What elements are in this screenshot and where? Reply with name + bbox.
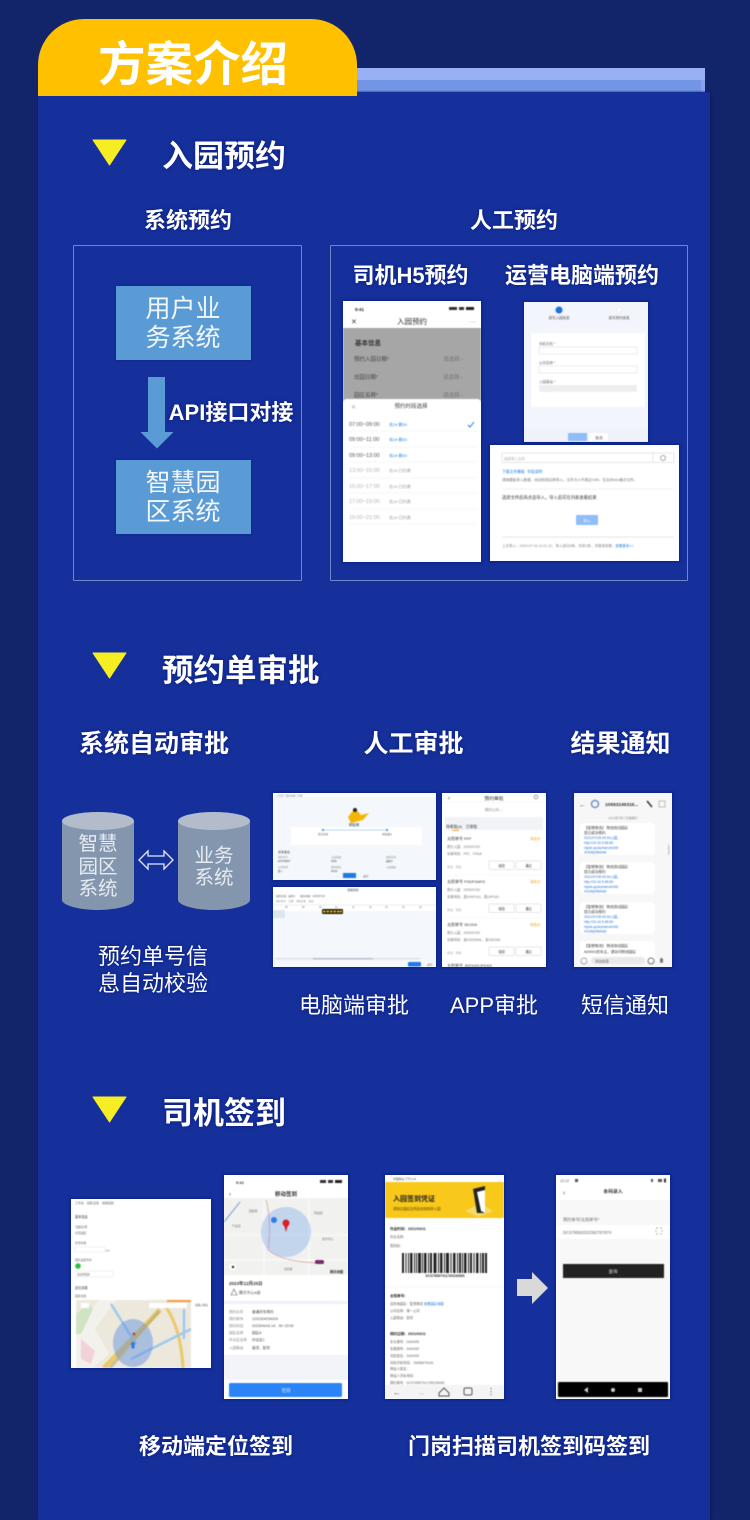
screenshot: PC approval detail: 提交申请 [318, 832, 328, 836]
heading: driver H5 booking: 司机H5预约 [352, 263, 469, 288]
screenshot: SMS notice: 2021/07/28 00:00入园， [584, 914, 621, 919]
screenshot: PC approval detail [273, 793, 436, 880]
screenshot: PC approval detail: 园区A [386, 859, 393, 863]
screenshot: mobile check-in: 创新路 [284, 1267, 293, 1271]
screenshot: mobile check-in: 腾讯中心A座 [239, 1290, 261, 1295]
screenshot: APP approval: 预计入园：2025/07/20 [447, 844, 480, 849]
screenshot: driver H5 phone: 名24 已约满 [389, 467, 411, 473]
screenshot: PC approval detail: 第一 [278, 869, 284, 873]
screenshot: check-in voucher: → [417, 1388, 425, 1397]
screenshot: PC upload: 选择导入文件 [504, 456, 525, 461]
screenshot: SMS notice: 2h3d9j2f8d0db [584, 850, 607, 854]
screenshot: driver H5 phone: 名24 已约满 [389, 483, 411, 489]
screenshot: gate entry: 条码录入 [603, 1188, 623, 1195]
screenshot: SMS notice: 2021/07/28 00:00入园， [584, 835, 621, 840]
screenshot: APP approval: 通过 [525, 863, 532, 868]
heading: manual approval: 人工审批 [363, 730, 464, 758]
screenshot: check-in voucher: 司机手机号码：15658679434 [390, 1360, 433, 1365]
screenshot: PC form: 填写入园信息 [548, 315, 570, 320]
screenshot: SMS notice: http://10.42.5.86:80 [584, 841, 613, 845]
screenshot: PC approval detail: 预约单号 [278, 855, 289, 859]
section 1 marker: triangle [92, 140, 126, 166]
screenshot: PC approval schedule: 09 [302, 907, 305, 909]
screenshot: APP approval: 预约公司 ⌄ [485, 807, 503, 812]
heading: auto approval: 系统自动审批 [79, 730, 229, 758]
screenshot: gate entry [556, 1175, 670, 1399]
section 3 marker: triangle [92, 1096, 126, 1122]
screenshot: check-in voucher: 押运人手机号码： [390, 1373, 416, 1378]
screenshot: PC approval detail: 返回 [363, 874, 369, 878]
screenshot: APP approval: 申请 : 司机 [447, 864, 462, 869]
box: user business system: 用户业 [145, 294, 220, 322]
screenshot: driver H5 phone: 名24 剩20 [389, 452, 408, 458]
screenshot: check-in voucher: 预约单号：DCS78567911765230665 [390, 1380, 445, 1385]
screenshot: driver H5 phone: 名24 剩20 [389, 436, 408, 442]
screenshot: PC form: 司机手机 * [539, 341, 556, 346]
screenshot: PC upload: 字段说明 [527, 469, 542, 474]
screenshot: driver H5 phone: 9:41 [355, 307, 365, 312]
screenshot: driver H5 phone: 07:00~09:00 [349, 422, 380, 428]
section 2 marker: triangle [92, 652, 126, 678]
screenshot: driver H5 phone: 19:00~21:00 [349, 515, 380, 521]
sub heading: manual booking: 人工预约 [470, 208, 558, 233]
screenshot: SMS notice: /dpsb-quduzhanxin/h5/ [584, 885, 618, 889]
caption: auto check [98, 944, 208, 996]
screenshot: mobile check-in: 2023/04/16 14：00~15:00 [252, 1324, 294, 1328]
screenshot: PC approval schedule: 排期详情 [347, 888, 359, 892]
screenshot: PC approval detail: 工作台 / 预约审批 / 详情 [276, 794, 303, 798]
screenshot: driver H5 phone: 基本信息 [355, 338, 382, 347]
screenshot: driver H5 phone: 请选择 › [443, 373, 463, 381]
screenshot: driver H5 phone: ✕ [351, 405, 356, 411]
screenshot: SMS notice: 2h3d9j2f8d0db [584, 930, 607, 934]
screenshot: driver H5 phone: 09:00~11:00 [349, 437, 379, 443]
screenshot: APP approval: 申请 : 司机 [447, 907, 462, 912]
screenshot: PC approval detail: 预约时段 [331, 865, 342, 869]
screenshot: APP approval: 申请 : 司机 [447, 950, 462, 955]
screenshot: SMS notice: 2h3d9j2f8d0db [584, 890, 607, 894]
screenshot: APP approval: 审批中 [530, 922, 541, 927]
screenshot: mobile check-in: 普通货车预约 [252, 1309, 274, 1314]
screenshot: driver H5 phone: 13:00~15:00 [349, 468, 380, 474]
caption: auto check: 预约单号信 [98, 944, 208, 969]
screenshot: check-in voucher: 作业时间：2021/03/11 [390, 1226, 426, 1231]
screenshot: geofence settings: 请输入地址 [195, 1303, 208, 1307]
icon: database smart park [62, 812, 134, 910]
screenshot: mobile check-in: 9:41 [236, 1180, 245, 1185]
screenshot: gate entry: 查询 [608, 1268, 618, 1275]
heading: result notice: 结果通知 [570, 730, 670, 758]
screenshot: mobile check-in: 预约单号 [229, 1316, 244, 1321]
box: user business system [116, 286, 250, 360]
screenshot: mobile check-in: 预约业务 [229, 1309, 244, 1314]
screenshot: SMS notice: 10693249316... [605, 802, 638, 808]
screenshot: check-in voucher: 押运人姓名： [390, 1366, 410, 1371]
screenshot: PC upload: 下载文件模板 [502, 469, 525, 474]
screenshot: SMS notice: 2021/07/28 00:00入园， [584, 874, 621, 879]
screenshot: driver H5 phone: 名24 已约满 [389, 514, 411, 520]
screenshot: geofence settings: 签到半径 [75, 1241, 86, 1245]
screenshot: driver H5 phone: 请选择 › [443, 391, 463, 399]
screenshot: PC approval schedule: 14 [385, 907, 388, 909]
screenshot: SMS notice: 【智慧物流】 物流测试园区 [584, 904, 629, 909]
screenshot: PC approval schedule: 11 [335, 907, 338, 909]
caption: PC approval: 电脑端审批 [299, 993, 409, 1018]
section 3 heading: 司机签到 [162, 1096, 286, 1131]
screenshot: APP approval: 预约审批 [484, 795, 504, 802]
screenshot: SMS notice: 【智慧物流】 物流测试园区 [584, 864, 629, 869]
screenshot: mobile check-in: 移动签到 [275, 1190, 297, 1198]
screenshot: driver H5 phone: 名24 剩20 [389, 421, 408, 427]
screenshot: geofence settings: 请选择园区 [77, 1272, 90, 1276]
screenshot: mobile check-in: 科技园 [314, 1211, 323, 1215]
arrow: down [140, 377, 174, 448]
screenshot: mobile check-in: 腾讯地图 [330, 1269, 344, 1274]
screenshot: check-in voucher: 公司名称：第一公司 [390, 1308, 420, 1313]
screenshot: PC approval schedule: 12 [352, 907, 355, 909]
icon: database business system [178, 812, 250, 910]
screenshot: APP approval: 预计入园：2025/07/20 [447, 930, 480, 935]
light strip behind panel [340, 68, 705, 96]
screenshot: SMS notice [574, 793, 672, 967]
screenshot: PC approval detail: DCS78567 [278, 860, 291, 863]
screenshot: driver H5 phone: ✕ [351, 319, 357, 326]
screenshot: APP approval: 太阳单号 SK2SA [447, 921, 477, 927]
screenshot: APP approval: 审批中 [530, 879, 541, 884]
screenshot: geofence settings: 基本信息 [75, 1214, 88, 1219]
screenshot: PC approval detail: 入园事由 [386, 865, 397, 869]
screenshot: PC approval schedule: 15 [402, 907, 405, 909]
screenshot: driver H5 phone: 园区名称* [354, 391, 379, 399]
screenshot: check-in voucher: 目的地园区：智慧物流 查看园区地图 [390, 1301, 444, 1306]
screenshot: mobile check-in: 装货、卸货 [252, 1345, 270, 1350]
screenshot: driver H5 phone: 出园日期* [354, 373, 379, 381]
box: user business system: 务系统 [145, 324, 220, 352]
screenshot: driver H5 phone: 入园预约 [397, 316, 427, 326]
screenshot: mobile check-in: ‹ [229, 1192, 231, 1198]
screenshot: driver H5 phone [343, 301, 481, 562]
screenshot: PC approval detail: 入园日期 [331, 855, 342, 859]
screenshot: check-in voucher: 请到达园区后凭此码到岗亭入园 [393, 1206, 441, 1211]
screenshot: PC approval schedule: 08 [285, 907, 288, 909]
screenshot: check-in voucher: ← [393, 1388, 401, 1397]
screenshot: SMS notice: http://10.42.5.86:80 [584, 920, 613, 924]
screenshot: driver H5 phone: ··· [469, 319, 476, 326]
screenshot: geofence settings: 示范园区 [75, 1231, 86, 1235]
screenshot: geofence settings: 定位设置 [75, 1285, 88, 1290]
screenshot: check-in voucher: 司机姓名：DAD939 [390, 1353, 419, 1358]
screenshot: gate entry: 预约单号/太阳单号* [563, 1216, 600, 1223]
screenshot: SMS notice: /dpsb-quduzhanxin/h5/ [584, 925, 618, 929]
screenshot: APP approval: 预计入园：2025/07/20 [447, 887, 480, 892]
screenshot: APP approval [442, 793, 546, 967]
screenshot: geofence settings: 园区位置 [75, 1294, 86, 1298]
screenshot: driver H5 phone: 请选择 › [443, 355, 463, 363]
arrow: right [517, 1272, 548, 1304]
screenshot: SMS notice: 【智慧物流】 物流测试园区 [584, 825, 629, 830]
screenshot: PC approval detail: 公司名称 [278, 865, 289, 869]
caption: gate scan check-in: 门岗扫描司机签到码签到 [408, 1434, 650, 1459]
icon: database business system: 业务 [194, 845, 234, 867]
screenshot: driver H5 phone: 15:00~17:00 [349, 484, 380, 490]
screenshot: PC upload: 上次导入：2024-07-16 10:21:12，导入成功5条，失败1条，详情请查看。查看更多>> [502, 543, 634, 548]
screenshot: PC approval detail: 审批通过 [382, 832, 392, 836]
screenshot: PC form: 公司名称 * [539, 360, 556, 365]
panel: manual booking [330, 245, 688, 581]
icon: database smart park: 园区 [78, 856, 118, 878]
screenshot: PC approval schedule [273, 887, 436, 967]
screenshot: APP approval: 待审批(4) 已审批 [446, 824, 477, 829]
box: smart park system: 区系统 [145, 498, 220, 526]
screenshot: PC approval schedule: 园区名称：园区A 预约日期：2025/07/20 [276, 894, 326, 898]
label: API integration: API接口对接 [169, 400, 293, 425]
screenshot: mobile check-in: 作业区名称 [229, 1337, 247, 1342]
icon: database smart park: 智慧 [78, 833, 118, 855]
screenshot: geofence settings: 围栏设置开关 [75, 1258, 92, 1262]
screenshot: mobile check-in: 产业园 [232, 1224, 241, 1228]
screenshot: driver H5 phone: 09:00~13:00 [349, 453, 380, 459]
screenshot: SMS notice: 添加信息 [595, 958, 609, 964]
screenshot: geofence settings [71, 1199, 211, 1368]
box: smart park system: 智慧园 [145, 468, 220, 496]
screenshot: check-in voucher: 车头牌号：DAD939 [390, 1339, 419, 1344]
screenshot: check-in voucher: 太阳单号： [390, 1293, 408, 1298]
screenshot: mobile check-in: 1231324234324 [252, 1317, 278, 1321]
screenshot: PC upload: 选择文件后再点击导入，导入后可在列表查看结果 [502, 494, 597, 501]
screenshot: APP approval: 驳回 [498, 863, 505, 868]
screenshot: driver H5 phone: 17:00~19:00 [349, 499, 380, 505]
screenshot: SMS notice: ← [579, 802, 586, 809]
panel: system booking [73, 245, 302, 581]
screenshot: gate entry: 12:12 [560, 1179, 569, 1183]
screenshot: PC approval schedule: 16 [419, 907, 422, 909]
screenshot: PC approval detail: 2025 [331, 860, 337, 863]
screenshot: mobile check-in: 签到 [282, 1387, 291, 1393]
screenshot: SMS notice: 您已成功预约 [584, 830, 606, 835]
screenshot: PC upload: 导入 [584, 518, 591, 523]
screenshot: PC approval detail: 园区名称 [386, 855, 397, 859]
screenshot: mobile check-in: 商务中心 [322, 1237, 333, 1241]
screenshot: SMS notice: 【智慧物流】 物流测试园区 [584, 943, 629, 948]
screenshot: check-in voucher: 车尾牌号：DAD939 [390, 1346, 419, 1351]
screenshot: APP approval: 驳回 [498, 949, 505, 954]
screenshot: geofence settings: km [106, 1248, 110, 1252]
screenshot: mobile check-in: 入园事由 [229, 1345, 244, 1350]
icon: database smart park: 系统 [78, 878, 118, 900]
screenshot: APP approval: 车牌号码：量H325284L、量H32345 [447, 937, 500, 942]
screenshot: mobile check-in: 2023年12月25日 [229, 1280, 263, 1287]
icon: double arrow [138, 850, 174, 870]
screenshot: driver H5 phone: 预约入园日期* [354, 355, 390, 363]
screenshot: PC approval detail: 基本信息 [278, 849, 290, 854]
screenshot: mobile check-in: 作业区1 [252, 1337, 265, 1342]
screenshot: PC approval schedule: 预约单号 车牌 司机手机 状态 [276, 899, 314, 903]
screenshot: APP approval: 太阳单号 FSDFSAFD [447, 878, 485, 884]
screenshot: APP approval: ‹ [448, 796, 450, 802]
sub heading: system booking: 系统预约 [144, 208, 232, 233]
screenshot: mobile check-in: 预约时段 [229, 1323, 244, 1328]
screenshot: APP approval: 通过 [525, 949, 532, 954]
screenshot: APP approval: 车牌号码：表U00FUIU、表U0FUIU [447, 894, 500, 899]
screenshot: SMS notice: /dpsb-quduzhanxin/h5/ [584, 846, 618, 850]
screenshot: APP approval: 通过 [525, 906, 532, 911]
screenshot: SMS notice: http://10.42.5.86:80 [584, 880, 613, 884]
screenshot: check-in voucher: 签到码： [390, 1243, 403, 1248]
screenshot: gate entry: ‹ [563, 1190, 566, 1197]
caption: APP approval: APP审批 [450, 993, 538, 1018]
screenshot: PC upload: 请按模板导入数据，自动校验后再导入，文件大小不超过10M，仅支持xlsx格式文件。 [502, 477, 637, 482]
screenshot: PC form [524, 302, 648, 442]
screenshot: mobile check-in: 园区名称 [229, 1330, 244, 1335]
screenshot: driver H5 phone: 名24 已约满 [389, 498, 411, 504]
screenshot: check-in voucher: DCS78567911765230665 [425, 1274, 465, 1278]
icon: database business system: 系统 [194, 867, 234, 889]
screenshot: PC approval schedule: 返回 [427, 962, 433, 966]
screenshot: check-in voucher: 作业名称： [390, 1234, 406, 1239]
caption: SMS notice: 短信通知 [581, 993, 669, 1018]
screenshot: PC approval schedule: 10 [319, 907, 322, 909]
screenshot: gate entry: DCS78562022392767674 [563, 1230, 612, 1235]
screenshot: check-in voucher: 入园签到凭证 [393, 1194, 435, 1203]
screenshot: check-in voucher: 入园事由：卸货 [390, 1315, 414, 1320]
screenshot: PC form: 入园事由 * [539, 379, 556, 384]
screenshot: SMS notice: 2021年7月17日星期六 [608, 815, 638, 820]
title tab [38, 19, 357, 96]
box: smart park system [116, 460, 250, 534]
screenshot: mobile check-in: 园区A [252, 1330, 262, 1335]
section 2 heading: 预约单审批 [162, 652, 320, 688]
screenshot: APP approval: 车牌号码：FFF、FDDA [447, 851, 483, 856]
screenshot: mobile check-in: 园区路 [249, 1209, 258, 1213]
screenshot: APP approval: 太阳单号 FFF [447, 835, 472, 841]
screenshot: PC form: 取消 [596, 435, 603, 440]
screenshot: mobile check-in [224, 1175, 348, 1399]
screenshot: APP approval: 驳回 [498, 906, 505, 911]
screenshot: driver H5 phone: 预约时段选择 [394, 402, 428, 410]
section 1 heading: 入园预约 [162, 139, 286, 174]
screenshot: PC approval schedule: 13 [369, 907, 372, 909]
screenshot: PC form: 填写预约信息 [608, 315, 630, 320]
screenshot: PC approval detail: 09:00 [331, 870, 338, 873]
screenshot: PC upload [490, 445, 679, 561]
screenshot: SMS notice: 您已成功预约 [584, 909, 606, 914]
screenshot: geofence settings: 工作台 园区设置 编辑园区 [75, 1200, 114, 1205]
title text: 方案介绍 [98, 39, 288, 92]
screenshot: SMS notice: 您已成功预约 [584, 869, 606, 874]
heading: operator PC booking: 运营电脑端预约 [505, 263, 659, 288]
screenshot: PC approval detail: 审批单 [349, 822, 360, 827]
screenshot: check-in voucher [385, 1175, 504, 1399]
caption: mobile location check-in: 移动端定位签到 [139, 1434, 293, 1459]
screenshot: check-in voucher: 预约日期：2021/03/11 [390, 1331, 426, 1336]
screenshot: APP approval: 审批中 [530, 836, 541, 841]
screenshot: SMS notice: A20001的车主，请访问物流园区 [584, 949, 636, 954]
caption: auto check: 息自动校验 [98, 971, 208, 996]
screenshot: check-in voucher: 中国移动 下午3:26 [393, 1177, 416, 1181]
screenshot: geofence settings: *园区名称 [75, 1225, 87, 1229]
